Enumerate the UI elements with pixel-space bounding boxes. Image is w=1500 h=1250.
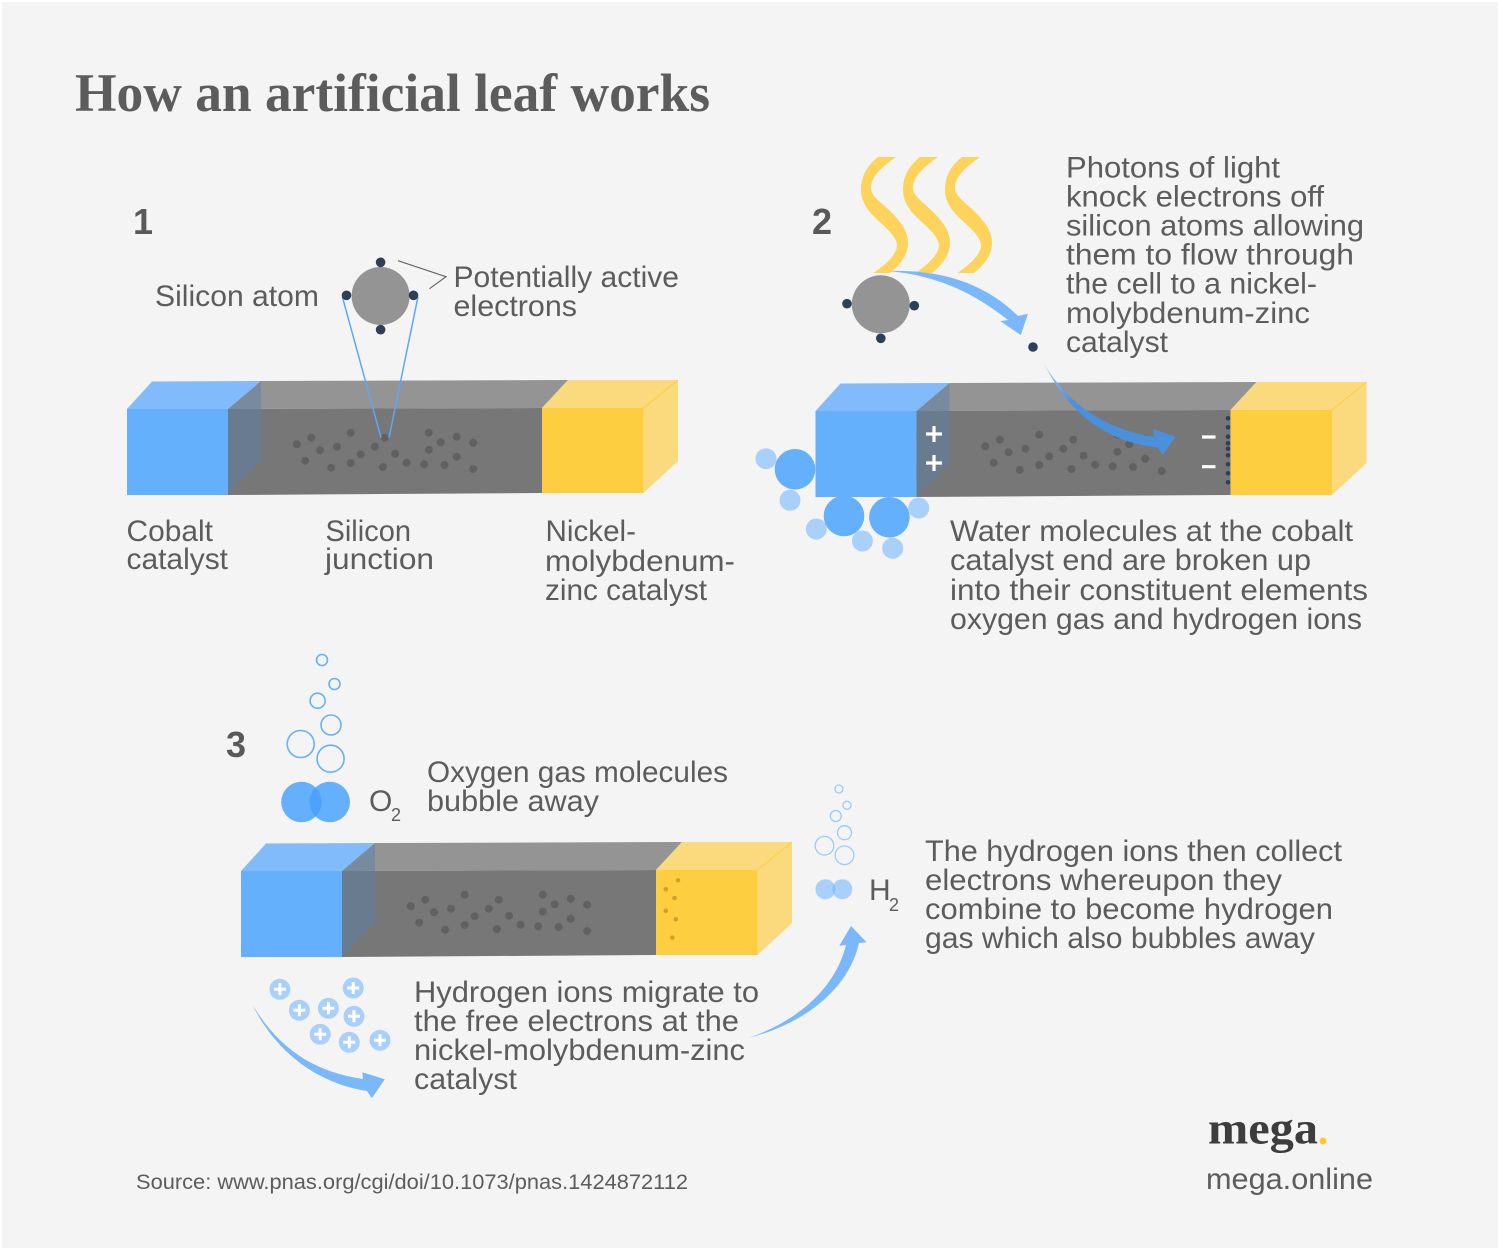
label: nickel-molybdenum-zinc catalyst <box>545 515 735 607</box>
label: O2 <box>369 785 401 825</box>
text: hydrogen ions migrate: nickel-molybdenum-zinc <box>414 1034 745 1067</box>
source: Source: www.pnas.org/cgi/doi/10.1073/pnas.1424872112 <box>136 1171 688 1194</box>
text: photons: them to flow through <box>1066 238 1354 272</box>
label: cobalt catalyst: catalyst <box>126 543 229 576</box>
text: hydrogen gas <box>925 835 1343 955</box>
label: silicon junction <box>324 515 434 576</box>
hydrogen dots on catalyst <box>664 878 680 940</box>
text: photons: molybdenum-zinc <box>1066 297 1310 330</box>
logo: mega: mega <box>1208 1102 1318 1154</box>
icon: hydrogen ions <box>269 978 390 1053</box>
label: H2: 2 <box>889 895 899 915</box>
label: potentially active electrons: electrons <box>454 290 577 323</box>
icon: oxygen bubbles <box>287 654 344 772</box>
solar cell bar with dots <box>127 380 678 495</box>
label: H2 <box>869 874 899 915</box>
label: cobalt catalyst <box>126 515 229 576</box>
icon: free electron <box>1028 342 1038 352</box>
step number 3: 3 <box>226 724 246 765</box>
icon: H2 molecule <box>815 879 852 899</box>
label: cobalt catalyst: Cobalt <box>126 515 214 548</box>
label: silicon atom: Silicon atom <box>155 280 319 313</box>
text: oxygen gas <box>427 756 728 818</box>
icon: O2 molecule <box>281 782 350 822</box>
text: water molecules <box>950 515 1368 636</box>
text: photons: knock electrons off <box>1066 180 1325 214</box>
arrow: photon knocks electron <box>889 271 1028 335</box>
text: water molecules: Water molecules at the cobalt <box>950 515 1354 548</box>
label: nickel-molybdenum-zinc catalyst: zinc catalyst <box>545 574 708 607</box>
text: hydrogen ions migrate: Hydrogen ions migrate to <box>414 976 759 1009</box>
text: hydrogen gas: electrons whereupon they <box>925 864 1282 897</box>
step number 1: 1 <box>133 201 153 242</box>
solar cell bar with dots <box>241 842 792 957</box>
text: photons: silicon atoms allowing <box>1066 210 1364 242</box>
title: How an artificial leaf works <box>75 63 710 123</box>
leader line to electrons <box>398 261 446 289</box>
text: hydrogen gas: The hydrogen ions then collect <box>925 835 1343 868</box>
label: O2: O <box>369 785 392 818</box>
icon: hydrogen bubbles <box>815 785 854 865</box>
label: silicon junction: junction <box>324 543 434 576</box>
panel: step 1 <box>126 201 735 607</box>
text: photons: catalyst <box>1066 326 1169 359</box>
text: hydrogen ions migrate <box>414 976 759 1096</box>
label: nickel-molybdenum-zinc catalyst: molybdenum- <box>545 545 735 578</box>
electrons along catalyst edge <box>1226 416 1230 485</box>
panel: step 2 <box>756 152 1368 636</box>
website: mega.online <box>1206 1163 1373 1196</box>
label: nickel-molybdenum-zinc catalyst: Nickel- <box>546 515 636 548</box>
arrow: electron flows through cell <box>1043 362 1176 455</box>
solar cell bar with dots <box>816 382 1366 497</box>
text: water molecules: oxygen gas and hydrogen ions <box>950 603 1362 636</box>
text: photons: Photons of light <box>1066 152 1281 184</box>
text: photons <box>1066 152 1364 359</box>
text: oxygen gas: bubble away <box>427 785 599 818</box>
text: photons: the cell to a nickel- <box>1066 268 1317 300</box>
label: O2: 2 <box>391 805 401 825</box>
blue zoom lines from silicon atom <box>342 297 418 438</box>
label: potentially active electrons: Potentially active <box>454 261 679 294</box>
text: water molecules: catalyst end are broken up <box>950 544 1311 577</box>
icon: water molecules <box>756 448 929 559</box>
label: potentially active electrons <box>454 261 679 323</box>
label: H2: H <box>869 874 891 907</box>
text: oxygen gas: Oxygen gas molecules <box>427 756 728 789</box>
minus charges <box>1202 437 1216 467</box>
icon: light waves <box>861 157 992 273</box>
icon: silicon atom losing electron <box>842 275 919 343</box>
arrow: ions migrate <box>252 1005 385 1098</box>
arrow: hydrogen rises <box>749 926 867 1038</box>
panel: step 3 <box>226 654 1343 1098</box>
text: hydrogen ions migrate: catalyst <box>414 1063 518 1096</box>
icon: silicon atom with electrons <box>342 258 418 335</box>
text: hydrogen gas: combine to become hydrogen <box>925 893 1333 926</box>
text: hydrogen gas: gas which also bubbles away <box>925 922 1315 955</box>
plus charges <box>926 426 942 471</box>
label: silicon junction: Silicon <box>326 515 411 548</box>
step number 2: 2 <box>812 201 832 242</box>
text: hydrogen ions migrate: the free electrons at the <box>414 1005 739 1038</box>
text: water molecules: into their constituent elements <box>950 574 1368 607</box>
